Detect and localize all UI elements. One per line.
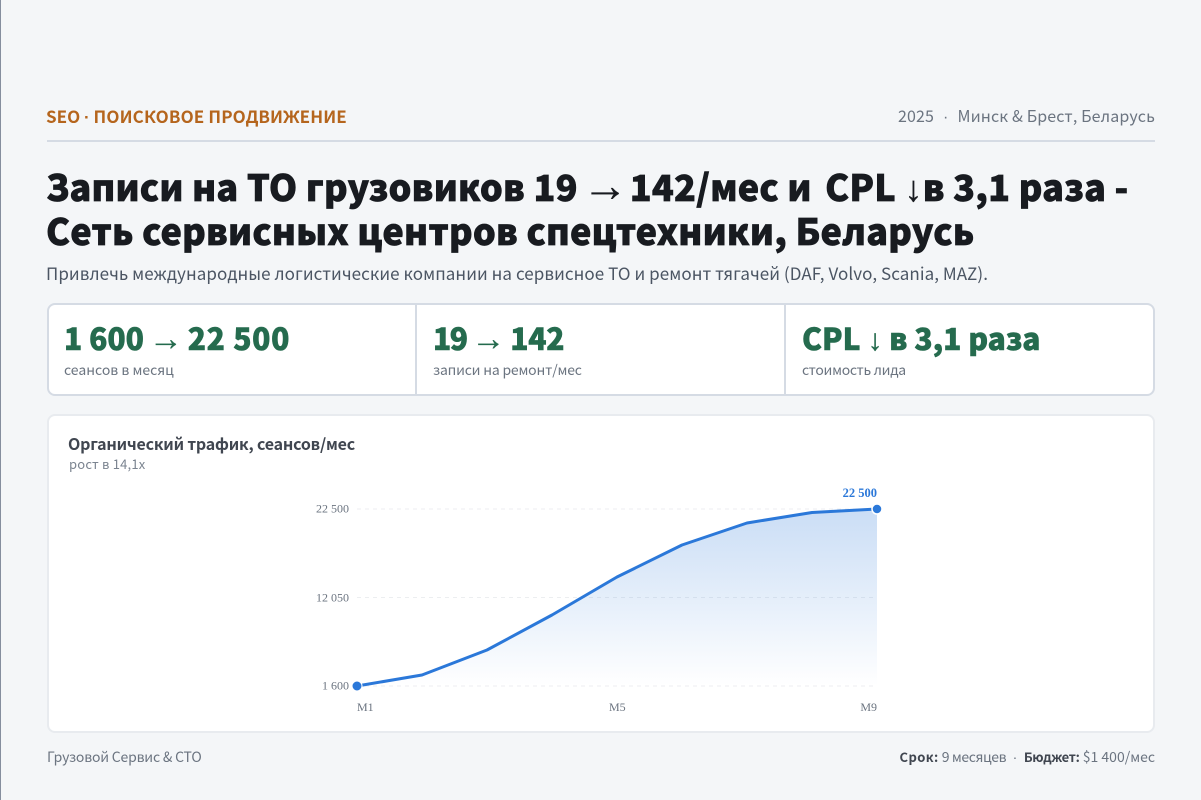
title: Записи на ТО грузовиков 19 → 142/мес и CPL ↓в 3,1 раза -	[46, 159, 1129, 212]
panel: KPI strip	[47, 303, 1155, 396]
KPI divider 2	[784, 305, 786, 394]
title	[46, 159, 1129, 256]
eyebrow label: SEO · ПОИСКОВОЕ ПРОДВИЖЕНИЕ	[46, 103, 347, 128]
y axis labels: 22 500	[316, 502, 349, 516]
left edge strip	[0, 0, 1, 800]
x axis labels: M9	[860, 700, 877, 714]
footer right: Срок: 9 месяцев · Бюджет: $1 400/мес	[900, 747, 1155, 767]
start point	[352, 681, 362, 691]
header rule	[47, 140, 1155, 142]
KPI 2 value: 19 → 142	[433, 315, 564, 359]
KPI 3 value: CPL ↓ в 3,1 раза	[802, 315, 1040, 359]
x axis labels: M5	[609, 700, 626, 714]
x axis labels: M1	[357, 700, 374, 714]
chart heading: Органический трафик, сеансов/мес	[68, 431, 355, 455]
panel: traffic chart	[47, 414, 1155, 733]
KPI 2 label: записи на ремонт/мес	[433, 360, 582, 380]
end value label: 22 500	[843, 486, 877, 500]
chart subheading: рост в 14,1x	[69, 454, 145, 473]
y axis labels	[316, 502, 349, 692]
end point	[872, 504, 882, 514]
KPI 1 value: 1 600 → 22 500	[64, 315, 290, 359]
y axis labels: 1 600	[322, 678, 349, 692]
KPI 3 label: стоимость лида	[802, 360, 906, 380]
area fill	[357, 509, 877, 686]
KPI divider 1	[415, 305, 417, 394]
y axis labels: 12 050	[316, 590, 349, 604]
footer left: Грузовой Сервис & СТО	[47, 747, 202, 767]
title: Сеть сервисных центров спецтехники, Беларусь	[46, 204, 974, 256]
subtitle: Привлечь международные логистические компании на сервисное ТО и ремонт тягачей (DAF, Volvo, Scania, MAZ).	[46, 260, 988, 285]
x axis labels	[357, 700, 877, 714]
traffic line	[357, 509, 877, 686]
KPI 1 label: сеансов в месяц	[64, 360, 174, 380]
year and location: 2025 · Минск & Брест, Беларусь	[898, 103, 1155, 127]
